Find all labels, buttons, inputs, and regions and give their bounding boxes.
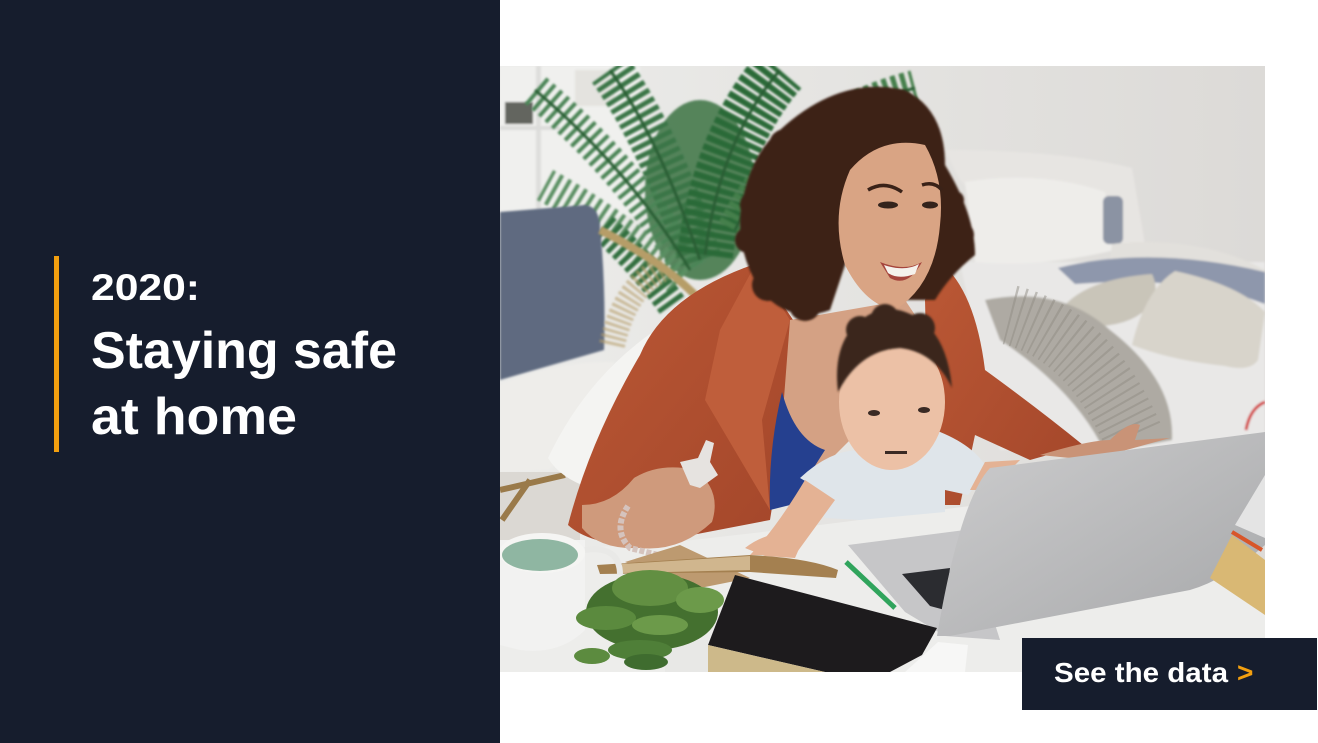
- brown paper and pencil: [597, 545, 838, 590]
- hair: [735, 87, 975, 321]
- mug: [500, 533, 623, 574]
- blue cushion: [500, 205, 604, 380]
- navy top: [770, 392, 825, 510]
- baby arm: [750, 480, 835, 555]
- wall shelf: [500, 66, 612, 208]
- lapel: [705, 265, 790, 510]
- baby hand on table: [745, 536, 798, 558]
- baby eyes: [868, 407, 930, 454]
- left navy panel: [0, 0, 500, 743]
- neck and chest: [784, 302, 915, 466]
- laptop: [848, 432, 1265, 640]
- woman's jacket: [568, 264, 800, 545]
- notebook: [708, 575, 937, 672]
- woman's far hand: [1040, 424, 1170, 460]
- title: Staying safe: [91, 322, 397, 380]
- baby shirt: [800, 430, 988, 520]
- floor and chair legs: [500, 472, 580, 540]
- title: at home: [91, 388, 297, 446]
- wooden box and colored items: [1210, 475, 1265, 615]
- see the data button: See the data: [1054, 657, 1228, 688]
- see the data button: [1022, 638, 1317, 710]
- beaded bracelet: [620, 506, 658, 555]
- see the data button: >: [1237, 657, 1253, 688]
- smile: [880, 262, 922, 281]
- rattan chair: [600, 230, 695, 345]
- face: [839, 143, 941, 310]
- orange accent bar: [54, 256, 59, 452]
- title: [91, 267, 397, 446]
- baby head: [839, 334, 945, 470]
- white chair back: [554, 333, 652, 484]
- green pen: [846, 562, 895, 608]
- succulent plant: [574, 570, 724, 672]
- woman's forearm and hand: [582, 467, 715, 548]
- pacifier: [680, 440, 718, 488]
- white seat: [500, 362, 615, 472]
- title: 2020:: [91, 267, 200, 308]
- eyes and brows: [868, 184, 942, 208]
- blanket knit texture: [1010, 315, 1135, 440]
- photo background wall: [500, 66, 1265, 560]
- table: [782, 506, 1265, 672]
- baby hair: [837, 304, 952, 392]
- photo: mother and baby working at a laptop: [499, 66, 1265, 672]
- paper sheet: [905, 642, 968, 672]
- bed and pillows: [964, 169, 1265, 449]
- palm plant: [535, 70, 915, 305]
